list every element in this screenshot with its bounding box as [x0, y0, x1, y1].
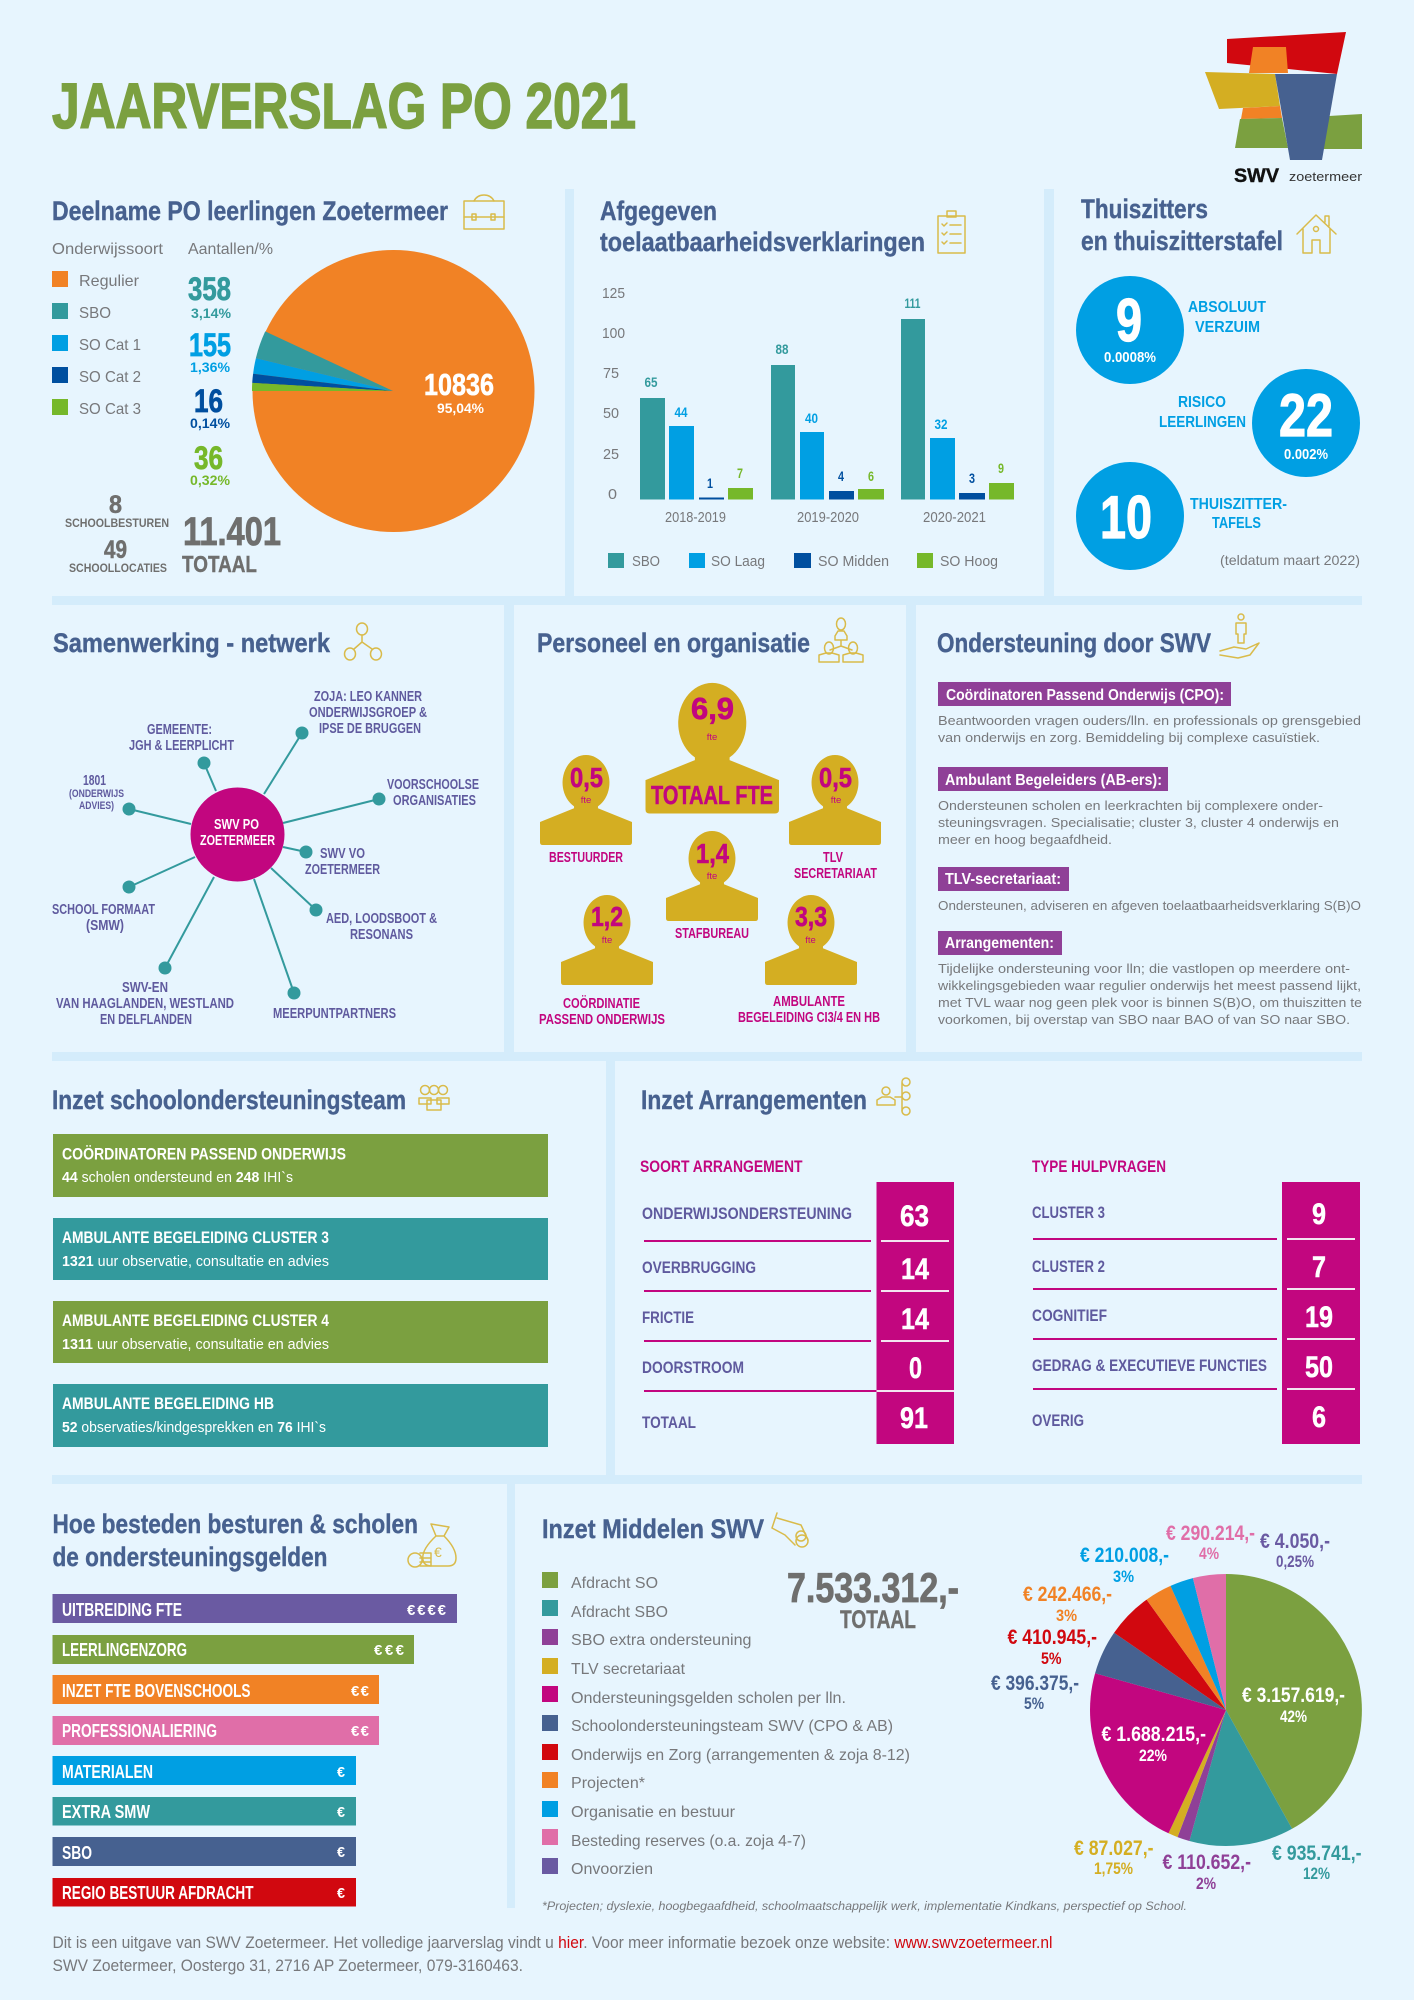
person: ambulante begeleiding: 3,3	[795, 901, 827, 932]
table: type hulpvragen	[1032, 1157, 1360, 1444]
pie labels: middelen	[991, 1521, 1362, 1893]
pie labels: middelen: 12%	[1303, 1864, 1330, 1883]
total: middelen: 7.533.312,-	[787, 1564, 959, 1611]
block: arrangementen: voorkomen, bij overstap van SBO naar BAO of van SO naar SBO.	[938, 1012, 1350, 1027]
legend: verklaringen	[608, 553, 998, 570]
person: stafbureau	[666, 831, 758, 942]
network diagram: ZOJA: LEO KANNER	[314, 689, 422, 705]
network diagram: 1801	[83, 773, 106, 789]
counts per school type: 3,14%	[191, 305, 232, 321]
person: ambulante begeleiding: BEGELEIDING CI3/4 EN HB	[738, 1010, 880, 1026]
bar chart: verklaringen per jaar	[602, 285, 1014, 526]
bar chart: verklaringen per jaar: 7	[737, 465, 743, 481]
bars: bestedingen: €	[337, 1885, 346, 1902]
bar chart: verklaringen per jaar: 6	[868, 468, 874, 484]
stat: risico leerlingen: 22	[1279, 382, 1333, 449]
panel: hoe besteden besturen	[52, 1509, 457, 1906]
person: coordinatie passend onderwijs: PASSEND ONDERWIJS	[539, 1012, 665, 1028]
box: ambulante begeleiding cluster 3: 1321 uur observatie, consultatie en advies	[62, 1254, 329, 1270]
person: coordinatie passend onderwijs: COÖRDINATIE	[563, 995, 640, 1012]
table: type hulpvragen: 7	[1312, 1251, 1326, 1284]
heading: thuiszitters: en thuiszitterstafel	[1081, 226, 1283, 256]
block: coordinatoren: Beantwoorden vragen ouders/lln. en professionals op grensgebied	[938, 713, 1361, 728]
bars: bestedingen: € € € €	[407, 1602, 447, 1619]
table: soort arrangement: DOORSTROOM	[642, 1358, 744, 1377]
total: middelen: TOTAAL	[840, 1606, 916, 1634]
panel: ondersteuning door SWV	[937, 614, 1362, 1027]
legend: onderwijssoort: Regulier	[79, 273, 140, 290]
legend: onderwijssoort: SO Cat 2	[79, 369, 141, 386]
bar chart: verklaringen per jaar: 40	[805, 410, 818, 426]
bar chart: verklaringen per jaar: 25	[603, 446, 619, 463]
network diagram: ZOETERMEER	[200, 833, 275, 849]
box: ambulante begeleiding hb: AMBULANTE BEGELEIDING HB	[62, 1394, 274, 1413]
pie chart: deelname: 95,04%	[437, 400, 485, 416]
bar chart: verklaringen per jaar: 100	[602, 325, 625, 342]
totals: TOTAAL	[182, 551, 257, 577]
pie labels: middelen: 42%	[1280, 1707, 1307, 1726]
pie labels: middelen: 3%	[1056, 1606, 1077, 1625]
legend: middelen: Projecten*	[571, 1775, 645, 1792]
pie chart: deelname	[252, 250, 535, 532]
title: JAARVERSLAG PO 2021	[52, 70, 636, 142]
panel: afgegeven toelaatbaarheidsverklaringen	[600, 196, 1014, 570]
legend: middelen: TLV secretariaat	[571, 1661, 686, 1678]
pie labels: middelen: 2%	[1196, 1874, 1216, 1893]
person: tlv secretariaat: TLV	[823, 850, 843, 866]
bar chart: verklaringen per jaar: 9	[998, 460, 1004, 476]
bar chart: verklaringen per jaar: 75	[603, 365, 619, 382]
panel: thuiszitters	[1076, 194, 1360, 570]
person: stafbureau: STAFBUREAU	[675, 926, 749, 942]
heading: besteding: de ondersteuningsgelden	[52, 1542, 328, 1572]
network diagram	[52, 689, 479, 1028]
legend: middelen: Onvoorzien	[571, 1861, 653, 1878]
pie labels: middelen: € 210.008,-	[1080, 1543, 1169, 1567]
table: soort arrangement: FRICTIE	[642, 1308, 694, 1327]
icon: briefcase	[464, 195, 504, 229]
panel: deelname PO leerlingen	[52, 195, 534, 577]
pie labels: middelen: 22%	[1139, 1746, 1167, 1765]
bar chart: verklaringen per jaar: 111	[904, 295, 921, 311]
bars: bestedingen: REGIO BESTUUR AFDRACHT	[62, 1883, 254, 1903]
block: arrangementen	[937, 931, 1362, 1027]
bars: bestedingen: €	[337, 1844, 346, 1861]
pie labels: middelen: € 110.652,-	[1162, 1850, 1251, 1874]
counts per school type: 36	[194, 440, 223, 476]
box: ambulante begeleiding cluster 4: AMBULANTE BEGELEIDING CLUSTER 4	[62, 1311, 329, 1330]
block: ambulant begeleiders	[938, 767, 1339, 847]
footnote: projecten: *Projecten; dyslexie, hoogbegaafdheid, schoolmaatschappelijk werk, implementatie Kindkans, perspectief op School.	[542, 1901, 1187, 1913]
bars: bestedingen: PROFESSIONALIERING	[62, 1721, 217, 1741]
network diagram: RESONANS	[350, 927, 413, 943]
legend: middelen: Onderwijs en Zorg (arrangementen & zoja 8-12)	[571, 1747, 910, 1764]
person: tlv secretariaat: SECRETARIAAT	[794, 866, 877, 882]
stat: absoluut verzuim: VERZUIM	[1195, 319, 1260, 336]
box: ambulante begeleiding hb: 52 observaties/kindgesprekken en 76 IHI`s	[62, 1420, 326, 1436]
table: soort arrangement: 14	[901, 1303, 929, 1336]
person: stafbureau: fte	[707, 871, 717, 882]
table: type hulpvragen: OVERIG	[1032, 1411, 1084, 1430]
total: middelen	[787, 1564, 959, 1634]
bars: bestedingen: € €	[351, 1723, 370, 1740]
stat: thuiszittertafels: TAFELS	[1212, 515, 1261, 532]
bars: bestedingen: UITBREIDING FTE	[62, 1600, 182, 1620]
bar chart: verklaringen per jaar: 44	[674, 404, 688, 420]
person: ambulante begeleiding: fte	[805, 935, 816, 946]
legend: verklaringen: SO Midden	[818, 553, 889, 570]
totals	[65, 491, 281, 577]
icon: clipboard	[938, 211, 965, 253]
box: ambulante begeleiding cluster 4	[53, 1301, 548, 1363]
legend: middelen: Schoolondersteuningsteam SWV (CPO & AB)	[571, 1718, 893, 1735]
block: tlv-secretariaat: TLV-secretariaat:	[945, 871, 1061, 888]
table: type hulpvragen: TYPE HULPVRAGEN	[1032, 1157, 1166, 1176]
table: type hulpvragen: GEDRAG & EXECUTIEVE FUNCTIES	[1032, 1356, 1267, 1375]
heading: arrangementen: Inzet Arrangementen	[641, 1085, 867, 1115]
box: coordinatoren passend onderwijs	[53, 1134, 548, 1197]
legend: middelen: Besteding reserves (o.a. zoja 4-7)	[571, 1833, 806, 1850]
counts per school type: 0,32%	[190, 472, 231, 488]
panel: inzet arrangementen	[640, 1078, 1360, 1444]
totals: SCHOOLLOCATIES	[69, 561, 167, 575]
block: ambulant begeleiders: Ondersteunen scholen en leerkrachten bij complexere onder-	[938, 798, 1323, 813]
block: coordinatoren: Coördinatoren Passend Onderwijs (CPO):	[946, 687, 1224, 704]
pie labels: middelen: € 290.214,-	[1166, 1521, 1255, 1545]
network diagram: AED, LOODSBOOT &	[326, 911, 437, 927]
panel: inzet middelen SWV	[542, 1513, 1362, 1913]
pie labels: middelen: € 87.027,-	[1074, 1836, 1154, 1860]
bars: bestedingen: LEERLINGENZORG	[62, 1640, 187, 1660]
person: tlv secretariaat: fte	[831, 795, 841, 806]
totals: 8	[109, 491, 122, 519]
pie labels: middelen: € 3.157.619,-	[1242, 1683, 1345, 1707]
pie labels: middelen: € 410.945,-	[1008, 1625, 1097, 1649]
totals: 11.401	[183, 510, 281, 554]
stat: risico leerlingen: RISICO	[1178, 394, 1226, 411]
bars: bestedingen: SBO	[62, 1843, 92, 1863]
box: coordinatoren passend onderwijs: COÖRDINATOREN PASSEND ONDERWIJS	[62, 1144, 346, 1164]
heading: schoolondersteuningsteam: Inzet schoolondersteuningsteam	[52, 1085, 406, 1115]
panel: samenwerking netwerk	[52, 623, 479, 1028]
network diagram: (ONDERWIJS	[69, 788, 124, 800]
person: coordinatie passend onderwijs: 1,2	[591, 901, 623, 932]
block: ambulant begeleiders: steuningsvragen. Specialisatie; cluster 3, cluster 4 onderwijs en	[938, 815, 1339, 830]
block: tlv-secretariaat: Ondersteunen, adviseren en afgeven toelaatbaarheidsverklaring S(B)O	[938, 898, 1361, 913]
table: type hulpvragen: 19	[1305, 1301, 1333, 1334]
legend: middelen: Afdracht SBO	[571, 1604, 668, 1621]
network diagram: SWV PO	[214, 817, 259, 833]
bar chart: verklaringen per jaar: 1	[707, 475, 713, 491]
legend: onderwijssoort	[52, 241, 273, 418]
icon: team	[419, 1086, 449, 1110]
legend: middelen: Afdracht SO	[571, 1575, 658, 1592]
person: totaal fte	[646, 683, 779, 814]
bar chart: verklaringen per jaar: 32	[934, 416, 948, 432]
person: ambulante begeleiding	[738, 895, 880, 1026]
pie labels: middelen: 4%	[1199, 1544, 1219, 1563]
person: stafbureau: 1,4	[696, 838, 729, 869]
stat: thuiszittertafels	[1076, 462, 1287, 570]
network diagram: SCHOOL FORMAAT	[52, 902, 155, 918]
heading: middelen: Inzet Middelen SWV	[542, 1514, 764, 1544]
network diagram: ORGANISATIES	[393, 793, 476, 809]
bars: bestedingen	[52, 1594, 457, 1906]
heading: personeel: Personeel en organisatie	[537, 628, 810, 658]
heading: ondersteuning: Ondersteuning door SWV	[937, 628, 1211, 658]
person: totaal fte: 6,9	[691, 691, 734, 726]
pie labels: middelen: € 935.741,-	[1272, 1841, 1362, 1865]
legend: verklaringen: SO Laag	[711, 553, 765, 570]
legend: onderwijssoort: SBO	[79, 305, 111, 322]
block: ambulant begeleiders: meer en hoog begaafdheid.	[938, 832, 1112, 847]
block: tlv-secretariaat	[938, 867, 1361, 913]
table: soort arrangement: 0	[909, 1352, 922, 1385]
table: soort arrangement	[640, 1157, 954, 1444]
pie labels: middelen: € 1.688.215,-	[1102, 1722, 1206, 1746]
table: type hulpvragen: 9	[1312, 1198, 1326, 1231]
person: tlv secretariaat	[789, 755, 881, 882]
counts per school type: 1,36%	[190, 359, 231, 375]
counts per school type: 16	[194, 383, 223, 419]
pie labels: middelen: 5%	[1041, 1649, 1062, 1668]
person: bestuurder: fte	[581, 795, 591, 806]
table: type hulpvragen: CLUSTER 2	[1032, 1257, 1105, 1276]
stat: risico leerlingen: LEERLINGEN	[1159, 414, 1246, 431]
block: arrangementen: wikkelingsgebieden waar regulier onderwijs het meest passend lijkt,	[937, 978, 1361, 993]
heading: besteding: Hoe besteden besturen & scholen	[52, 1509, 418, 1539]
pie labels: middelen: € 396.375,-	[991, 1671, 1079, 1695]
stat: risico leerlingen	[1159, 369, 1360, 477]
network diagram: SWV-EN	[122, 980, 168, 996]
bars: bestedingen: €	[337, 1764, 346, 1781]
heading: deelname: Deelname PO leerlingen Zoetermeer	[52, 196, 448, 226]
block: coordinatoren	[938, 682, 1361, 745]
bar chart: verklaringen per jaar: 3	[969, 470, 975, 486]
counts per school type	[188, 271, 232, 488]
legend: verklaringen: SBO	[632, 553, 660, 570]
stat: thuiszittertafels: THUISZITTER-	[1190, 496, 1287, 513]
bars: bestedingen: € €	[351, 1683, 370, 1700]
heading: besteding	[52, 1509, 418, 1572]
network diagram: ADVIES)	[79, 800, 114, 812]
legend: middelen: SBO extra ondersteuning	[571, 1632, 752, 1649]
box: ambulante begeleiding cluster 3	[53, 1218, 548, 1280]
bars: bestedingen: EXTRA SMW	[62, 1802, 150, 1822]
block: arrangementen: Tijdelijke ondersteuning voor lln; die vastlopen op meerdere ont-	[938, 961, 1350, 976]
panel: personeel en organisatie	[537, 618, 881, 1028]
legend: onderwijssoort: Onderwijssoort	[52, 241, 164, 258]
table: soort arrangement: 63	[900, 1200, 929, 1233]
footer: SWV Zoetermeer, Oostergo 31, 2716 AP Zoetermeer, 079-3160463.	[52, 1957, 523, 1975]
bars: bestedingen: € € €	[374, 1642, 405, 1659]
person: bestuurder	[540, 755, 632, 866]
pie labels: middelen: € 242.466,-	[1023, 1582, 1112, 1606]
counts per school type: 0,14%	[190, 415, 231, 431]
counts per school type: 358	[188, 271, 231, 307]
table: soort arrangement: 14	[901, 1253, 929, 1286]
block: arrangementen: Arrangementen:	[945, 935, 1054, 952]
icon: organisation people	[819, 618, 863, 662]
bar chart: verklaringen per jaar: 88	[776, 341, 789, 357]
table: soort arrangement: TOTAAL	[642, 1413, 696, 1432]
legend: middelen: Organisatie en bestuur	[571, 1804, 736, 1821]
bar chart: verklaringen per jaar: 2020-2021	[923, 509, 986, 526]
legend: onderwijssoort: Aantallen/%	[188, 241, 273, 258]
note: teldatum: (teldatum maart 2022)	[1220, 552, 1360, 568]
person: bestuurder: 0,5	[570, 762, 603, 793]
totals: SCHOOLBESTUREN	[65, 516, 169, 530]
person: ambulante begeleiding: AMBULANTE	[773, 994, 845, 1010]
table: soort arrangement: OVERBRUGGING	[642, 1258, 756, 1277]
heading: samenwerking: Samenwerking - netwerk	[53, 628, 331, 658]
heading: verklaringen	[600, 196, 925, 257]
person: coordinatie passend onderwijs	[539, 895, 665, 1028]
logo: SWV zoetermeer: zoetermeer	[1289, 169, 1363, 184]
legend: onderwijssoort: SO Cat 3	[79, 401, 141, 418]
footer	[52, 1934, 1052, 1975]
logo: SWV zoetermeer: SWV	[1234, 166, 1279, 187]
logo: SWV zoetermeer	[1205, 32, 1363, 187]
network diagram: (SMW)	[86, 918, 124, 934]
icon: flow	[877, 1078, 910, 1115]
stat: absoluut verzuim: 9	[1116, 287, 1142, 354]
block: ambulant begeleiders: Ambulant Begeleiders (AB-ers):	[945, 772, 1162, 789]
heading: thuiszitters: Thuiszitters	[1081, 194, 1208, 224]
pie labels: middelen: 1,75%	[1094, 1859, 1133, 1878]
table: type hulpvragen: 50	[1305, 1351, 1333, 1384]
person: coordinatie passend onderwijs: fte	[602, 935, 612, 946]
table: type hulpvragen: CLUSTER 3	[1032, 1203, 1105, 1222]
panel: inzet schoolondersteuningsteam	[52, 1085, 548, 1447]
box: ambulante begeleiding cluster 3: AMBULANTE BEGELEIDING CLUSTER 3	[62, 1228, 329, 1247]
icon: house	[1297, 215, 1336, 253]
bar chart: verklaringen per jaar: 125	[602, 285, 625, 302]
network diagram: JGH & LEERPLICHT	[129, 738, 234, 754]
network diagram: MEERPUNTPARTNERS	[273, 1006, 396, 1022]
block: coordinatoren: van onderwijs en zorg. Bemiddeling bij complexe casuïstiek.	[938, 730, 1320, 745]
network diagram: SWV VO	[320, 846, 365, 862]
block: arrangementen: met TVL waar nog geen plek voor is binnen S(B)O, om thuiszitten te	[938, 995, 1362, 1010]
bars: bestedingen: INZET FTE BOVENSCHOOLS	[62, 1681, 250, 1701]
network diagram: GEMEENTE:	[147, 722, 212, 738]
table: soort arrangement: ONDERWIJSONDERSTEUNING	[642, 1204, 852, 1223]
network diagram: ZOETERMEER	[305, 862, 380, 878]
box: coordinatoren passend onderwijs: 44 scholen ondersteund en 248 IHI`s	[62, 1170, 293, 1186]
person: bestuurder: BESTUURDER	[549, 850, 623, 866]
legend: middelen: Ondersteuningsgelden scholen per lln.	[571, 1690, 846, 1707]
bar chart: verklaringen per jaar: 65	[644, 374, 658, 390]
stat: absoluut verzuim: 0.0008%	[1104, 349, 1156, 366]
person: totaal fte: TOTAAL FTE	[651, 780, 773, 810]
pie labels: middelen: 3%	[1113, 1567, 1134, 1586]
bar chart: verklaringen per jaar: 50	[603, 405, 619, 422]
network diagram: IPSE DE BRUGGEN	[319, 721, 421, 737]
bar chart: verklaringen per jaar: 0	[608, 486, 617, 503]
box: ambulante begeleiding hb	[53, 1384, 548, 1447]
network diagram: ONDERWIJSGROEP &	[309, 705, 427, 721]
pie labels: middelen: 5%	[1024, 1694, 1044, 1713]
pie chart: middelen	[1090, 1574, 1362, 1846]
bar chart: verklaringen per jaar: 2018-2019	[665, 509, 726, 526]
stat: thuiszittertafels: 10	[1100, 484, 1152, 551]
totals: 49	[104, 536, 127, 564]
footer: Dit is een uitgave van SWV Zoetermeer. Het volledige jaarverslag vindt u hier. Voor meer informatie bezoek onze website: www.swvzoetermeer.nl	[52, 1934, 1052, 1952]
table: type hulpvragen: COGNITIEF	[1032, 1306, 1107, 1325]
stat: risico leerlingen: 0.002%	[1284, 446, 1328, 463]
legend: middelen	[542, 1572, 910, 1878]
bar chart: verklaringen per jaar: 2019-2020	[797, 509, 859, 526]
legend: verklaringen: SO Hoog	[940, 553, 998, 570]
bar chart: verklaringen per jaar: 4	[838, 468, 844, 484]
network diagram: VOORSCHOOLSE	[387, 777, 479, 793]
person: tlv secretariaat: 0,5	[819, 762, 852, 793]
stat: absoluut verzuim: ABSOLUUT	[1188, 299, 1266, 316]
icon: money bag: €	[434, 1544, 442, 1560]
pie chart: deelname: 10836	[424, 367, 494, 402]
table: soort arrangement: SOORT ARRANGEMENT	[640, 1157, 803, 1176]
icon: hand with person	[1220, 614, 1259, 658]
heading: verklaringen: toelaatbaarheidsverklaringen	[600, 227, 925, 257]
box: ambulante begeleiding cluster 4: 1311 uur observatie, consultatie en advies	[62, 1337, 329, 1353]
bars: bestedingen: €	[337, 1804, 346, 1821]
person: totaal fte: fte	[707, 732, 717, 743]
pie labels: middelen: € 4.050,-	[1260, 1529, 1330, 1553]
bars: bestedingen: MATERIALEN	[62, 1762, 153, 1782]
icon: money bag	[408, 1524, 456, 1567]
icon: hand with coins	[772, 1513, 808, 1547]
heading: thuiszitters	[1081, 194, 1283, 256]
icon: network	[344, 623, 382, 660]
heading: verklaringen: Afgegeven	[600, 196, 717, 226]
stat: absoluut verzuim	[1076, 276, 1266, 384]
table: type hulpvragen: 6	[1312, 1401, 1326, 1434]
network diagram: VAN HAAGLANDEN, WESTLAND	[56, 996, 234, 1012]
pie labels: middelen: 0,25%	[1276, 1552, 1314, 1571]
network diagram: EN DELFLANDEN	[100, 1012, 192, 1028]
counts per school type: 155	[189, 327, 231, 363]
legend: onderwijssoort: SO Cat 1	[79, 337, 141, 354]
table: soort arrangement: 91	[900, 1402, 928, 1435]
